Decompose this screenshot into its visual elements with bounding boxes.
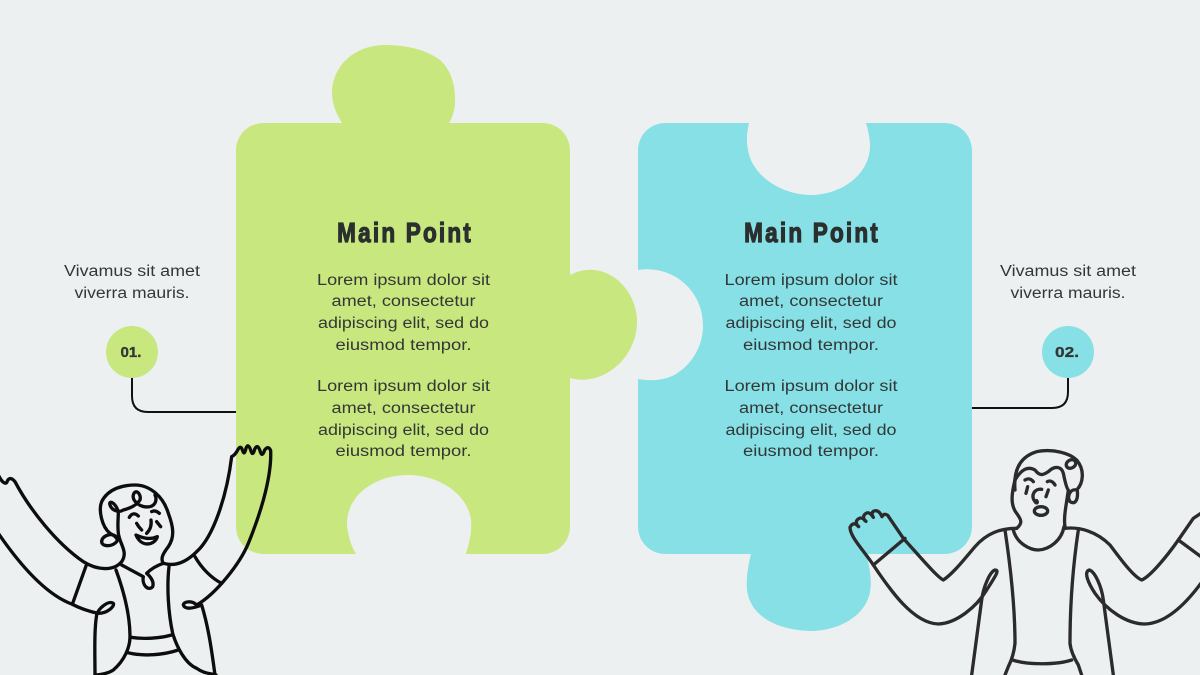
text block: blue panel lower paragraph: eiusmod tempor. — [743, 443, 879, 460]
heading: blue panel: Main Point — [744, 218, 878, 249]
text block: green panel lower paragraph: amet, consectetur — [332, 400, 476, 417]
badge: 02 — [1042, 326, 1094, 378]
illustration: shrugging man — [850, 451, 1200, 675]
text block: blue panel lower paragraph — [724, 378, 898, 460]
illustration: cheering woman — [0, 446, 271, 675]
badge: 01: 01. — [120, 344, 142, 361]
connector: point 01 — [132, 378, 237, 412]
callout text: point 02: viverra mauris. — [1010, 285, 1126, 302]
callout text: point 01: viverra mauris. — [74, 285, 190, 302]
badge: 02: 02. — [1055, 344, 1079, 361]
text block: green panel upper paragraph: eiusmod tempor. — [336, 337, 472, 354]
callout text: point 01: Vivamus sit amet — [64, 263, 201, 280]
text block: green panel lower paragraph — [317, 378, 491, 460]
text block: green panel lower paragraph: adipiscing elit, sed do — [318, 422, 489, 439]
text block: green panel upper paragraph: Lorem ipsum dolor sit — [317, 272, 491, 289]
text block: green panel upper paragraph: amet, consectetur — [332, 293, 476, 310]
text block: blue panel lower paragraph: Lorem ipsum dolor sit — [724, 378, 898, 395]
panel: blue puzzle piece — [638, 123, 972, 631]
callout text: point 02: Vivamus sit amet — [1000, 263, 1137, 280]
callout text: point 01 — [64, 263, 201, 302]
text block: green panel upper paragraph: adipiscing elit, sed do — [318, 315, 489, 332]
text block: blue panel upper paragraph — [724, 272, 898, 354]
text block: blue panel lower paragraph: adipiscing elit, sed do — [726, 422, 896, 439]
callout text: point 02 — [1000, 263, 1137, 302]
text block: blue panel upper paragraph: amet, consectetur — [739, 293, 883, 310]
panel: green puzzle piece — [236, 45, 637, 554]
text block: blue panel upper paragraph: adipiscing elit, sed do — [726, 315, 896, 332]
text block: blue panel upper paragraph: Lorem ipsum dolor sit — [724, 272, 898, 289]
text block: blue panel lower paragraph: amet, consectetur — [739, 400, 883, 417]
text block: blue panel upper paragraph: eiusmod tempor. — [743, 337, 879, 354]
text block: green panel lower paragraph: Lorem ipsum dolor sit — [317, 378, 491, 395]
heading: green panel: Main Point — [337, 218, 471, 249]
badge: 01 — [106, 326, 158, 378]
text block: green panel lower paragraph: eiusmod tempor. — [336, 443, 472, 460]
text block: green panel upper paragraph — [317, 272, 491, 354]
connector: point 02 — [972, 378, 1068, 408]
